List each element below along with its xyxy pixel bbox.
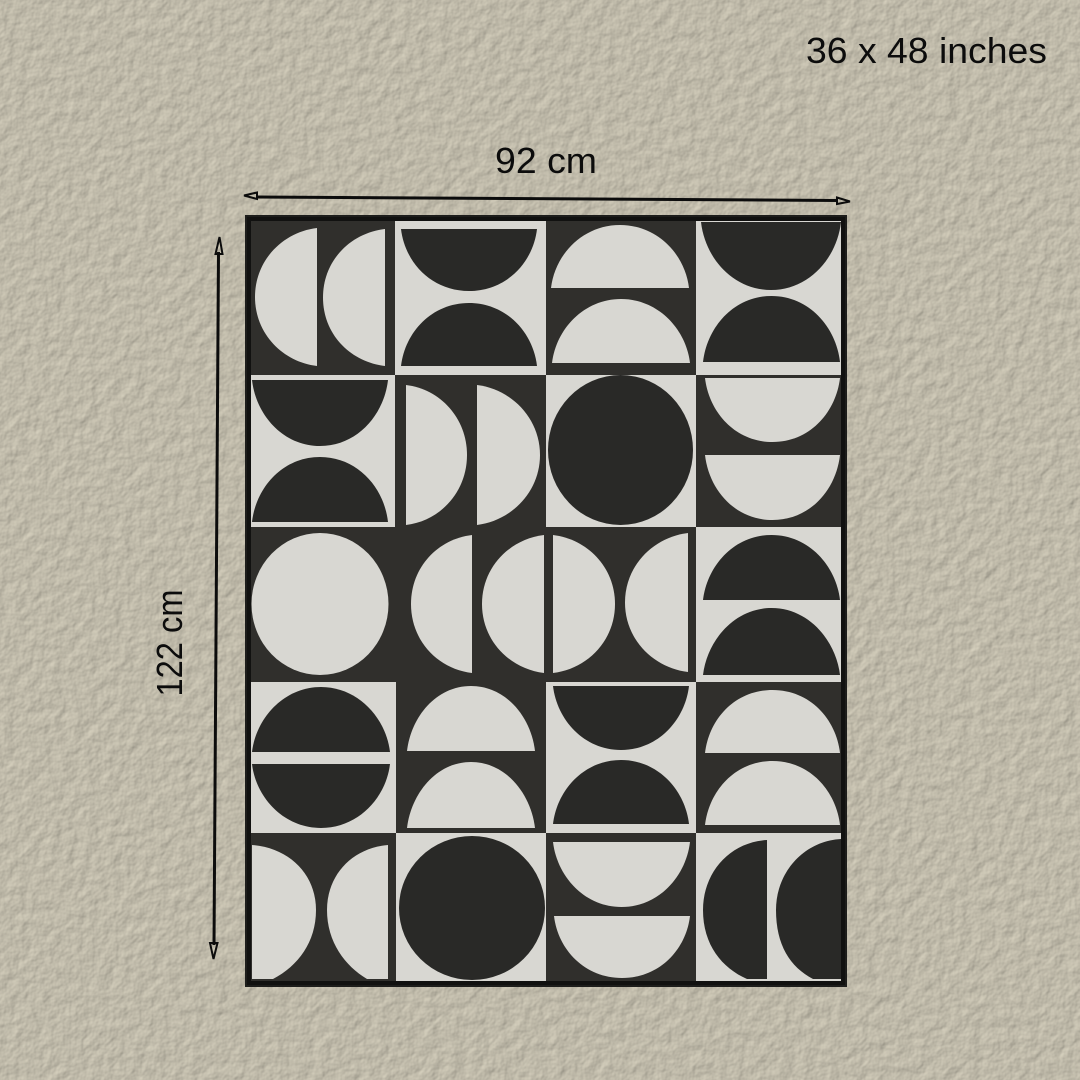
framed artwork [245, 215, 847, 987]
tile: two white halves facing up [696, 682, 841, 833]
tile: two white halves facing left [395, 527, 546, 682]
tile: two white halves facing up [396, 682, 546, 833]
tile: two white halves facing right [395, 375, 546, 527]
tile: split black circle [251, 682, 396, 833]
tile: two black halves facing each other [251, 375, 395, 527]
row 4 [251, 682, 841, 833]
height arrow [210, 237, 222, 959]
tile: two black halves facing each other [546, 682, 696, 833]
row 1 [251, 221, 841, 375]
tile: two black halves facing each other [395, 221, 546, 375]
tile: black circle [546, 375, 696, 527]
tile: two black halves facing left [696, 833, 841, 981]
tile: two white halves facing left [251, 221, 395, 375]
tile: two white halves facing each other [251, 833, 396, 981]
row 2 [251, 375, 841, 527]
tile: two white halves facing down [546, 833, 696, 981]
height label: 122 cm: 122 cm [149, 590, 190, 696]
tile: two white halves facing up [546, 221, 696, 375]
row 3 [251, 527, 841, 682]
size label: inches: 36 x 48 inches [806, 30, 1047, 71]
tile: two black halves facing up [696, 527, 841, 682]
row 5 [251, 833, 841, 981]
tile: white circle [251, 527, 395, 682]
width label: 92 cm: 92 cm [495, 140, 597, 181]
tile: white halves facing apart [546, 527, 696, 682]
outer frame [245, 215, 847, 987]
width arrow [244, 192, 850, 204]
tile: black circle [396, 833, 546, 981]
tile: two black halves facing each other [696, 221, 841, 375]
tile: two white halves facing down [696, 375, 841, 527]
